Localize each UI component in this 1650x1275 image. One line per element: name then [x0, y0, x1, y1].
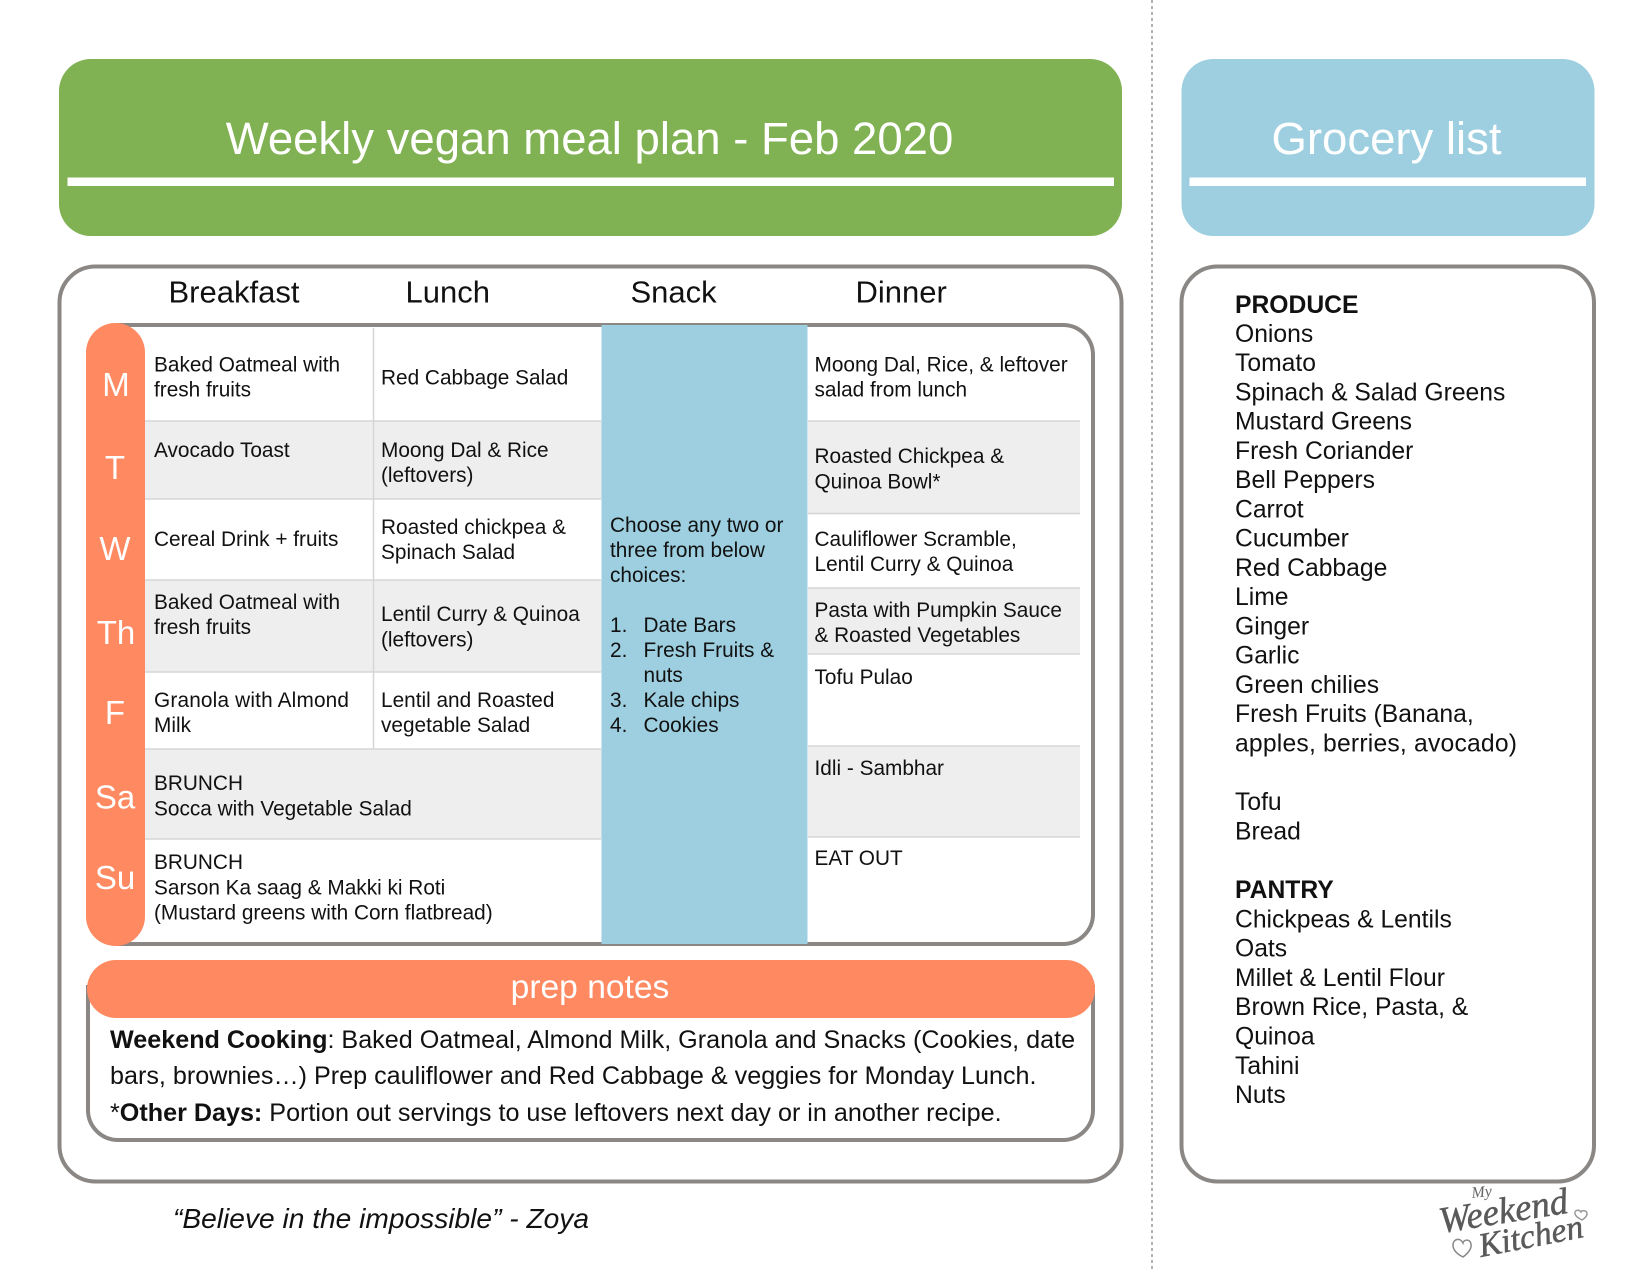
panel: meal plan outer frame — [60, 266, 1122, 1182]
title banner: grocery list — [1182, 59, 1594, 236]
logo: My Weekend Kitchen: Kitchen — [1474, 1208, 1586, 1265]
panel: grocery list: Lime — [1235, 584, 1289, 611]
panel: grocery list: PANTRY — [1235, 877, 1334, 904]
dinner cells — [814, 354, 1068, 870]
meal table — [86, 323, 1093, 946]
panel: prep notes: Weekend Cooking: Baked Oatmeal, Almond Milk, Granola and Snacks (Cookies, date — [110, 1026, 1075, 1054]
panel: grocery list: Cucumber — [1235, 526, 1349, 553]
snack column: choices: — [610, 564, 686, 587]
title banner: grocery list: Grocery list — [1271, 113, 1502, 164]
breakfast and lunch cells: BRUNCH — [154, 772, 243, 795]
snack column: Cookies — [644, 714, 719, 737]
breakfast and lunch cells: Roasted chickpea & — [381, 516, 566, 539]
panel: grocery list: Brown Rice, Pasta, & — [1235, 994, 1469, 1021]
panel: grocery list: Ginger — [1235, 613, 1309, 640]
panel: grocery list: Green chilies — [1235, 672, 1379, 699]
day column: M — [102, 366, 130, 403]
snack column: 4. — [610, 714, 627, 737]
column headings: Breakfast — [168, 274, 300, 310]
column headings: Lunch — [406, 274, 490, 310]
dinner cells: Pasta with Pumpkin Sauce — [814, 599, 1062, 622]
breakfast and lunch cells: fresh fruits — [154, 616, 251, 639]
dinner cells: Moong Dal, Rice, & leftover — [814, 354, 1068, 376]
breakfast and lunch cells: (leftovers) — [381, 628, 473, 652]
panel: grocery list: apples, berries, avocado) — [1235, 730, 1517, 757]
snack column: Fresh Fruits & — [644, 639, 774, 662]
panel: grocery list: Bell Peppers — [1235, 467, 1375, 494]
day column: Sa — [95, 778, 136, 816]
day column: Th — [97, 614, 135, 651]
panel: grocery list: Spinach & Salad Greens — [1235, 379, 1505, 406]
breakfast and lunch cells: Milk — [154, 714, 192, 737]
dinner cells: Lentil Curry & Quinoa — [814, 553, 1014, 576]
panel: prep notes: bars, brownies…) Prep cauliflower and Red Cabbage & veggies for Monday Lunch. — [110, 1062, 1037, 1090]
day column: Su — [95, 859, 135, 896]
dinner cells: Idli - Sambhar — [814, 757, 944, 780]
dinner cells: Tofu Pulao — [814, 666, 913, 689]
snack column: three from below — [610, 539, 766, 562]
snack column: 1. — [610, 614, 627, 637]
day column: T — [105, 449, 125, 486]
dinner cells: salad from lunch — [814, 379, 967, 402]
panel: grocery list: Tofu — [1235, 789, 1282, 816]
snack column: 2. — [610, 639, 627, 662]
breakfast and lunch cells: (Mustard greens with Corn flatbread) — [154, 902, 493, 924]
snack column — [602, 325, 808, 944]
panel: grocery list: Carrot — [1235, 496, 1304, 523]
panel: grocery list: Nuts — [1235, 1082, 1286, 1109]
breakfast and lunch cells: Lentil and Roasted — [381, 689, 554, 712]
panel: grocery list: Fresh Fruits (Banana, — [1235, 701, 1474, 728]
panel: prep notes: *Other Days: Portion out servings to use leftovers next day or in another recipe. — [110, 1099, 1002, 1127]
dinner cells: Cauliflower Scramble, — [814, 528, 1017, 551]
panel: grocery list: Tahini — [1235, 1053, 1300, 1080]
panel: grocery list — [1182, 266, 1594, 1182]
breakfast and lunch cells: Spinach Salad — [381, 541, 515, 564]
snack column: nuts — [644, 664, 683, 687]
breakfast and lunch cells: vegetable Salad — [381, 714, 530, 737]
breakfast and lunch cells: BRUNCH — [154, 851, 243, 874]
panel: grocery list: Red Cabbage — [1235, 555, 1387, 582]
breakfast and lunch cells: Avocado Toast — [154, 439, 290, 462]
snack column: Date Bars — [644, 614, 736, 637]
day column — [86, 323, 145, 946]
panel: grocery list: Mustard Greens — [1235, 408, 1412, 436]
breakfast and lunch cells: Granola with Almond — [154, 689, 349, 712]
column headings — [168, 274, 947, 310]
snack column: Choose any two or — [610, 514, 783, 537]
breakfast and lunch cells: Lentil Curry & Quinoa — [381, 603, 580, 626]
panel: grocery list: Chickpeas & Lentils — [1235, 906, 1452, 934]
breakfast and lunch cells: Red Cabbage Salad — [381, 366, 568, 390]
logo: My Weekend Kitchen: My — [1470, 1183, 1494, 1202]
panel: grocery list: Millet & Lentil Flour — [1235, 965, 1445, 992]
snack column: 3. — [610, 689, 627, 712]
breakfast and lunch cells: Sarson Ka saag & Makki ki Roti — [154, 877, 445, 900]
panel: grocery list: Fresh Coriander — [1235, 438, 1413, 465]
column headings: Dinner — [856, 274, 947, 310]
logo: My Weekend Kitchen — [1436, 1181, 1587, 1265]
dinner cells: EAT OUT — [814, 847, 903, 870]
dinner cells: Roasted Chickpea & — [814, 445, 1004, 468]
dinner cells: & Roasted Vegetables — [814, 624, 1020, 647]
breakfast and lunch cells: Baked Oatmeal with — [154, 591, 340, 614]
title banner: weekly meal plan: Weekly vegan meal plan - Feb 2020 — [226, 113, 953, 164]
day column: F — [105, 694, 125, 731]
panel: grocery list: Onions — [1235, 321, 1313, 348]
day column: W — [99, 530, 131, 567]
breakfast and lunch cells: fresh fruits — [154, 379, 251, 402]
dinner cells: Quinoa Bowl* — [814, 470, 941, 494]
title banner: weekly meal plan — [59, 59, 1122, 236]
panel: prep notes — [87, 960, 1095, 1140]
panel: prep notes: prep notes — [511, 969, 669, 1006]
panel: grocery list: Bread — [1235, 818, 1301, 845]
breakfast and lunch cells — [154, 354, 580, 924]
panel: grocery list: PRODUCE — [1235, 292, 1358, 319]
breakfast and lunch cells: Cereal Drink + fruits — [154, 528, 338, 551]
quote: “Believe in the impossible” - Zoya — [173, 1203, 589, 1234]
panel: grocery list: Tomato — [1235, 350, 1316, 377]
column headings: Snack — [630, 274, 717, 310]
panel: grocery list: Garlic — [1235, 643, 1299, 670]
panel: grocery list: Quinoa — [1235, 1024, 1315, 1050]
breakfast and lunch cells: Moong Dal & Rice — [381, 439, 549, 462]
breakfast and lunch cells: (leftovers) — [381, 464, 473, 487]
snack column: Kale chips — [644, 689, 739, 712]
panel: grocery list: Oats — [1235, 936, 1287, 963]
breakfast and lunch cells: Baked Oatmeal with — [154, 354, 340, 376]
logo: My Weekend Kitchen: Weekend — [1436, 1181, 1571, 1242]
breakfast and lunch cells: Socca with Vegetable Salad — [154, 797, 412, 820]
